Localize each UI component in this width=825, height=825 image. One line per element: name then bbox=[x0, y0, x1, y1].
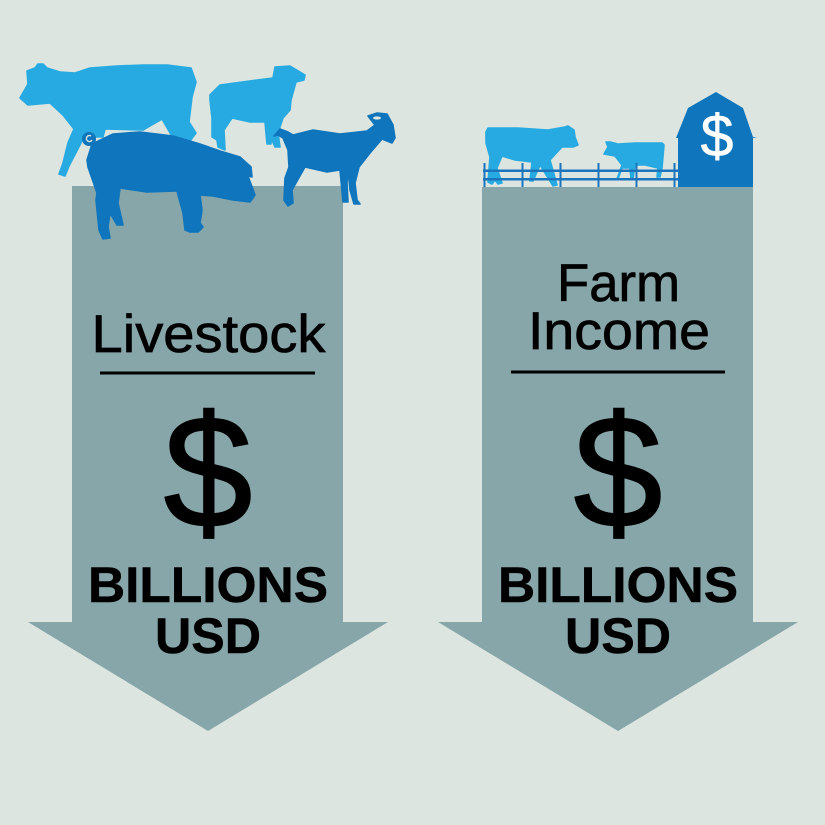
icon: cow bbox=[20, 64, 196, 176]
icon: fence bbox=[483, 163, 678, 187]
heading: Farm Income bbox=[528, 254, 710, 361]
icon: barn with dollar: $ bbox=[701, 103, 733, 169]
dollar symbol: $ bbox=[164, 382, 252, 561]
label: billions usd: BILLIONS bbox=[88, 557, 328, 613]
dollar symbol: $ bbox=[574, 382, 662, 561]
heading: Farm Income: Farm bbox=[557, 254, 680, 313]
down arrow: farm income bbox=[438, 187, 798, 731]
icon: sheep bbox=[210, 66, 305, 150]
icon: large cow bbox=[486, 126, 578, 186]
panel: farm income bbox=[438, 92, 798, 731]
heading: Farm Income: Income bbox=[528, 302, 710, 361]
label: billions usd: USD bbox=[155, 608, 261, 664]
icon: pig bbox=[82, 132, 255, 239]
heading: Livestock: Livestock bbox=[92, 305, 326, 364]
label: billions usd bbox=[88, 557, 328, 664]
panel: livestock bbox=[20, 64, 395, 731]
label: billions usd: USD bbox=[565, 608, 671, 664]
icon: barn with dollar bbox=[676, 92, 757, 187]
label: billions usd bbox=[498, 557, 738, 664]
icon: calf bbox=[604, 142, 664, 179]
down arrow: livestock bbox=[28, 186, 388, 731]
label: billions usd: BILLIONS bbox=[498, 557, 738, 613]
icon: goat bbox=[274, 113, 395, 206]
